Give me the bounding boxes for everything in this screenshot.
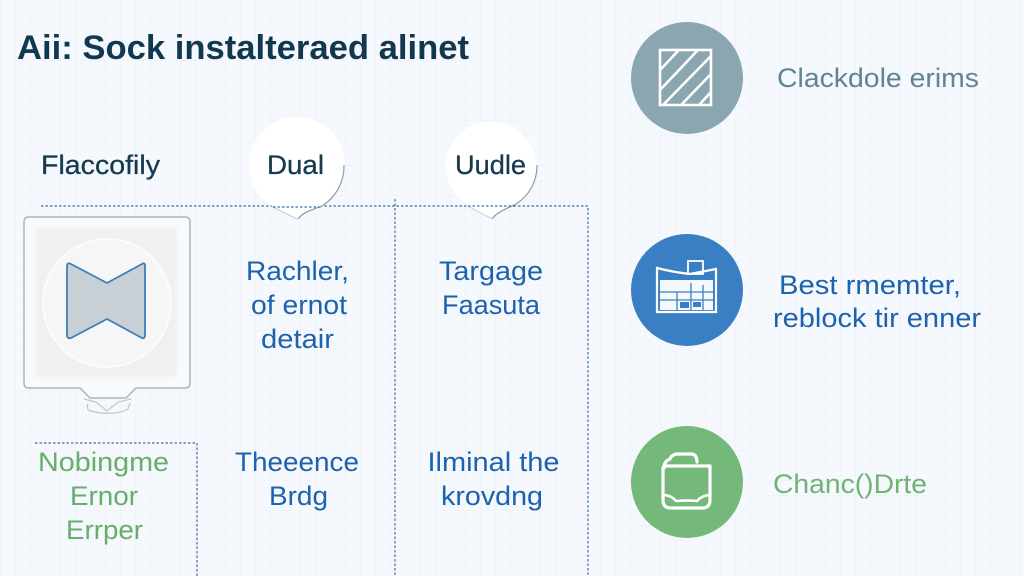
cell text: Nobingme Ernor Errper: Ernor: [70, 481, 138, 511]
label: Best rmemter, reblock tir enner: reblock tir enner: [773, 303, 981, 333]
bowtie icon card: [24, 217, 190, 413]
cell text: Targage Faasuta: [439, 256, 543, 320]
card base clip: [84, 399, 131, 413]
cell text: Ilminal the krovdng: [428, 447, 560, 511]
icon: green circle with cup: [631, 426, 743, 538]
column heading bubble: Dual: [249, 117, 345, 219]
cell text: Targage Faasuta: Faasuta: [442, 290, 541, 320]
column heading bubble: Uudle: [446, 122, 537, 219]
column heading: Flaccofily: Flaccofily: [41, 150, 161, 180]
cell text: Nobingme Ernor Errper: Errper: [66, 515, 143, 545]
cell text: Rachler, of ernot detair: of ernot: [251, 290, 348, 320]
cell text: Theeence Brdg: Brdg: [269, 481, 328, 511]
cell text: Nobingme Ernor Errper: [38, 447, 169, 545]
icon: blue circle with calendar board: [631, 234, 743, 346]
icon: grey circle with hatched square: [631, 22, 743, 134]
cell text: Rachler, of ernot detair: detair: [261, 324, 334, 354]
label: Clackdole erims: Clackdole erims: [777, 63, 979, 93]
icon: bowtie: [67, 263, 145, 338]
cell text: Theeence Brdg: [235, 447, 359, 511]
cell text: Ilminal the krovdng: krovdng: [441, 481, 543, 511]
cell text: Targage Faasuta: Targage: [439, 256, 543, 286]
column heading bubble: Uudle: Uudle: [455, 150, 526, 180]
label: Best rmemter, reblock tir enner: Best rmemter,: [779, 270, 961, 300]
label: Chanc()Drte: Chanc()Drte: [773, 469, 927, 499]
cell text: Ilminal the krovdng: Ilminal the: [428, 447, 560, 477]
label: Best rmemter, reblock tir enner: [773, 270, 981, 333]
cell text: Rachler, of ernot detair: [246, 256, 349, 354]
cell text: Theeence Brdg: Theeence: [235, 447, 359, 477]
cell text: Nobingme Ernor Errper: Nobingme: [38, 447, 169, 477]
table dashed grid lines: [35, 199, 588, 576]
column heading bubble: Dual: Dual: [267, 150, 324, 180]
cell text: Rachler, of ernot detair: Rachler,: [246, 256, 349, 286]
title: Aii: Sock instalteraed alinet: [17, 29, 469, 67]
